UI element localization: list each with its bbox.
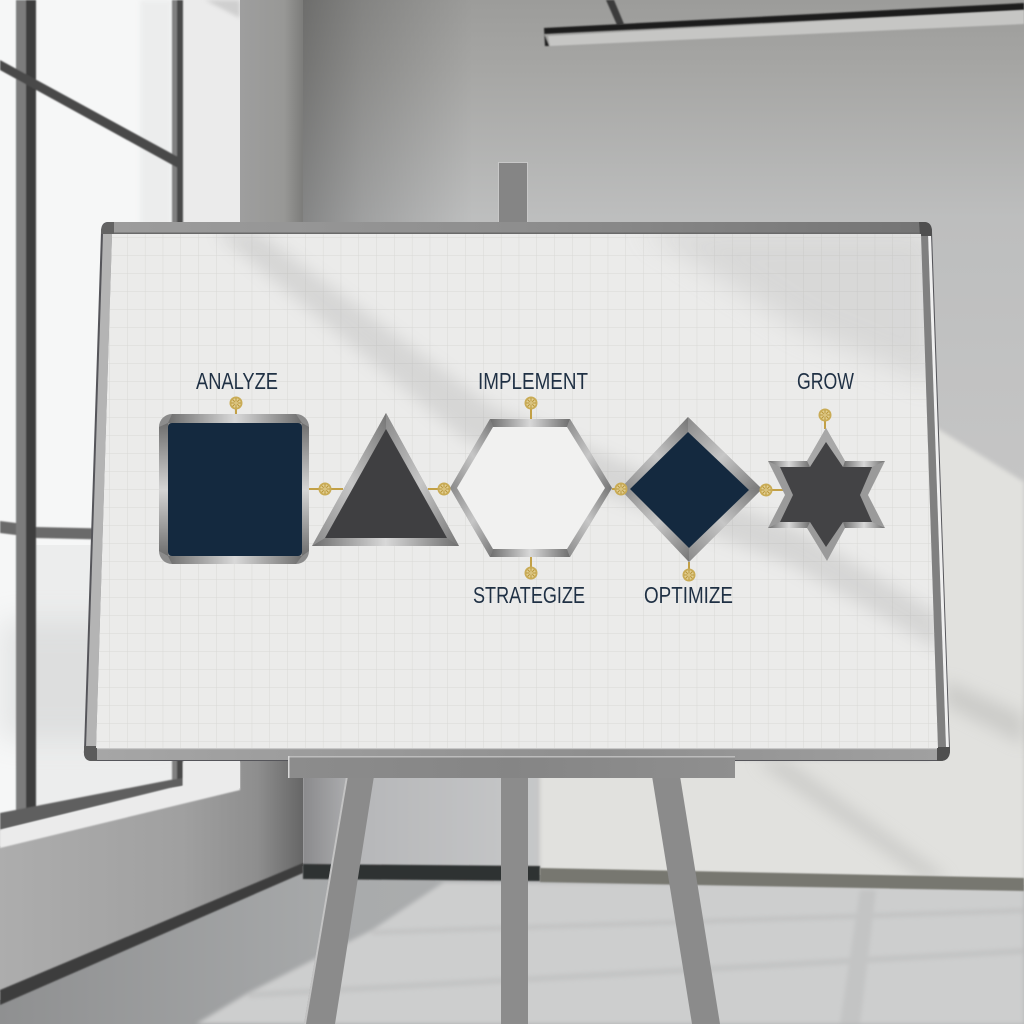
sunlit wall area <box>540 424 1024 880</box>
floor light patch <box>196 882 1024 1024</box>
corner shading on wall <box>303 0 473 760</box>
left rail <box>86 234 112 748</box>
grid lines <box>96 234 938 748</box>
label: implement: IMPLEMENT <box>478 368 588 394</box>
step 1: square <box>159 414 309 564</box>
right rail <box>921 234 946 748</box>
wall soft shadows <box>755 760 950 880</box>
easel tray <box>288 756 735 778</box>
window side reveal <box>183 0 240 800</box>
back wall <box>240 0 1024 870</box>
side wall <box>240 0 303 235</box>
board frame <box>84 222 950 761</box>
connector lines <box>236 404 825 575</box>
window mullions <box>0 0 183 830</box>
left wall below window <box>0 760 303 992</box>
bottom rail <box>96 748 938 760</box>
connector knobs <box>230 396 832 582</box>
board light and shadow <box>215 228 940 650</box>
floor stripes <box>248 890 1024 1024</box>
window panes <box>0 0 183 830</box>
whiteboard <box>84 222 950 761</box>
top rail <box>112 222 922 234</box>
left leg <box>304 776 374 1024</box>
board surface <box>96 234 938 748</box>
wall shadow beside easel <box>303 758 538 870</box>
window sill <box>0 762 240 848</box>
baseboards <box>0 863 303 1005</box>
right leg <box>652 776 720 1024</box>
easel <box>304 162 720 1024</box>
center leg <box>501 776 528 1024</box>
step 5: star <box>768 428 885 561</box>
label: strategize: STRATEGIZE <box>473 582 585 608</box>
step 2: triangle <box>312 413 459 546</box>
label: analyze: ANALYZE <box>196 368 278 394</box>
step 3: hexagon <box>450 419 612 557</box>
label: optimize: OPTIMIZE <box>644 582 733 608</box>
corner caps <box>101 222 114 234</box>
ceiling light fixture <box>544 0 1024 46</box>
easel top peg <box>498 162 528 224</box>
step 4: diamond <box>620 417 762 562</box>
label: grow: GROW <box>797 368 854 394</box>
floor <box>0 870 1024 1024</box>
